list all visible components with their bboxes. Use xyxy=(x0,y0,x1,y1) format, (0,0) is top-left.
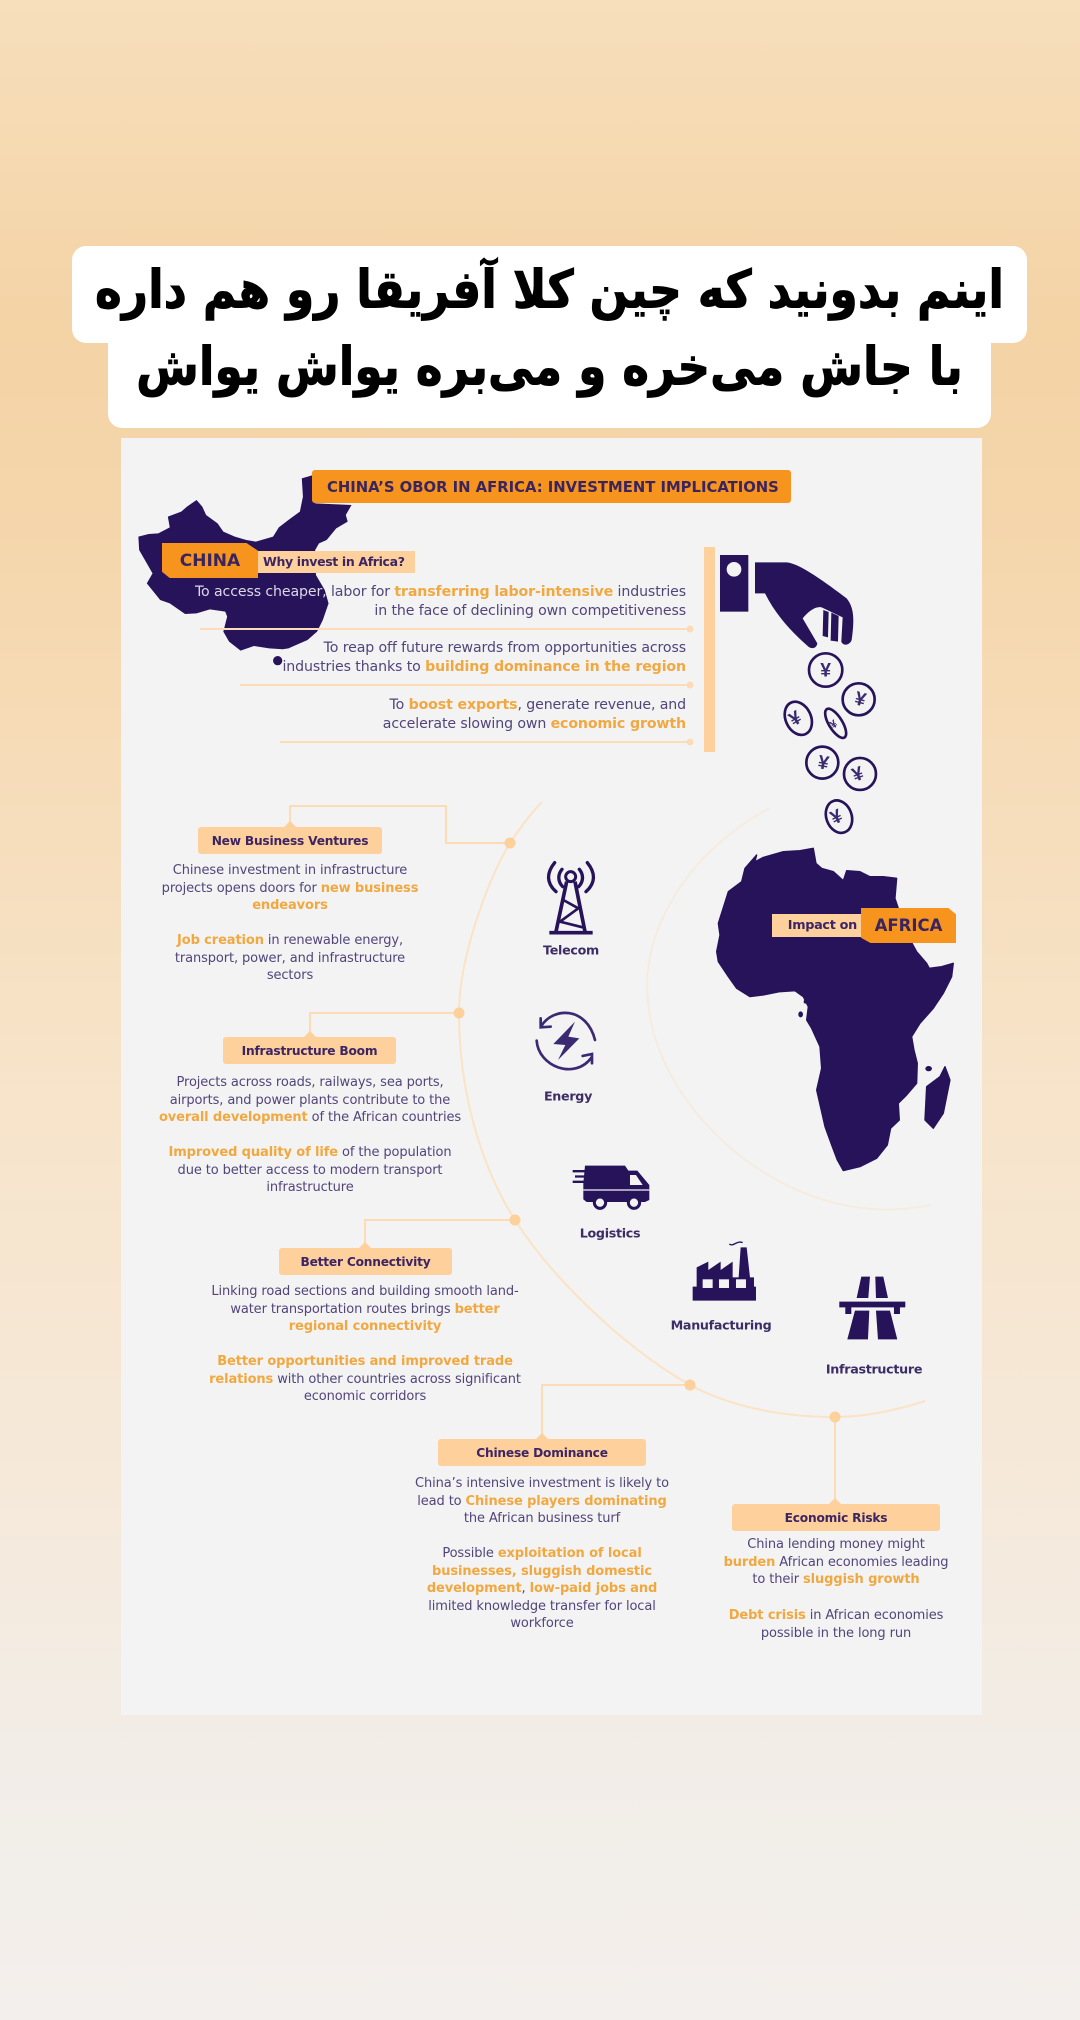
paragraph 1: overall development of the African countries xyxy=(159,1110,461,1125)
icon label: Logistics: Logistics xyxy=(580,1226,640,1240)
main timeline arc xyxy=(459,802,925,1417)
reason 2: industries thanks to building dominance in the region xyxy=(282,659,686,675)
reason divider arrows xyxy=(200,626,692,744)
paragraph 2 xyxy=(175,933,405,983)
title: Persian caption xyxy=(72,246,1027,428)
paragraph 1: regional connectivity xyxy=(289,1319,441,1334)
icon: hand dropping coins: ¥ xyxy=(849,763,867,787)
caption text: با جاش می‌خره و می‌بره یواش یواش xyxy=(136,336,963,397)
icon label: Energy: Energy xyxy=(544,1088,592,1104)
caption text: اینم بدونید که چین کلا آفریقا رو هم داره xyxy=(95,259,1004,320)
icon: hand dropping coins xyxy=(720,555,876,837)
icon: telecom tower xyxy=(549,863,593,933)
paragraph 2: Debt crisis in African economies xyxy=(729,1608,943,1623)
paragraph 1: China lending money might xyxy=(747,1537,925,1552)
icon: logistics truck xyxy=(573,1166,649,1208)
coins xyxy=(780,653,876,837)
paragraph 2 xyxy=(209,1354,521,1404)
paragraph 1: projects opens doors for new business xyxy=(162,881,418,896)
reasons list xyxy=(194,584,686,732)
paragraph 2: economic corridors xyxy=(304,1389,426,1404)
icon: infrastructure road xyxy=(839,1277,905,1339)
paragraph 2: due to better access to modern transport xyxy=(178,1163,442,1178)
tag: CHINA: CHINA xyxy=(180,551,240,571)
icon: hand dropping coins: ¥ xyxy=(820,661,831,682)
paragraph 1 xyxy=(159,1075,461,1125)
paragraph 1 xyxy=(211,1284,519,1334)
paragraph 2: infrastructure xyxy=(266,1180,354,1195)
map: Africa xyxy=(717,848,953,1171)
paragraph 2: workforce xyxy=(510,1616,574,1631)
icon: hand dropping coins: ¥ xyxy=(852,688,868,712)
caption background top xyxy=(72,246,1027,343)
paragraph 1: airports, and power plants contribute to the xyxy=(170,1093,450,1108)
tag: AFRICA xyxy=(861,908,956,943)
tag: Better Connectivity xyxy=(300,1254,430,1268)
heading bar xyxy=(312,470,791,503)
reason 3: accelerate slowing own economic growth xyxy=(383,716,686,732)
icon: hand dropping coins: ¥ xyxy=(827,806,846,829)
block: Economic Risks xyxy=(724,1504,948,1641)
tag xyxy=(438,1439,646,1466)
tag: AFRICA: AFRICA xyxy=(875,916,942,935)
icon: hand dropping coins: ¥ xyxy=(816,752,831,775)
paragraph 1: to their sluggish growth xyxy=(752,1572,920,1587)
tag: Impact on xyxy=(772,914,861,937)
tag: Impact on: Impact on xyxy=(788,918,857,933)
paragraph 2: Improved quality of life of the population xyxy=(169,1145,451,1160)
reason 3: To boost exports, generate revenue, and xyxy=(390,697,686,713)
paragraph 2: limited knowledge transfer for local xyxy=(428,1599,656,1614)
reason 2 xyxy=(282,640,686,675)
paragraph 2: Better opportunities and improved trade xyxy=(217,1354,513,1369)
paragraph 1 xyxy=(415,1476,669,1526)
paragraph 1: Chinese investment in infrastructure xyxy=(173,863,407,878)
paragraph 1: lead to Chinese players dominating xyxy=(417,1494,667,1509)
icon label: Telecom: Telecom xyxy=(543,942,599,958)
tag xyxy=(223,1037,396,1064)
icon: energy xyxy=(537,1013,595,1069)
paragraph 2: relations with other countries across significant xyxy=(209,1372,521,1387)
paragraph 1: Projects across roads, railways, sea ports, xyxy=(176,1075,444,1090)
paragraph 1: burden African economies leading xyxy=(724,1555,948,1570)
reason 2: To reap off future rewards from opportunities across xyxy=(324,640,686,656)
paragraph 2 xyxy=(169,1145,451,1195)
block: Better Connectivity xyxy=(209,1248,521,1404)
icon label: Manufacturing: Manufacturing xyxy=(671,1318,771,1332)
block: Infrastructure Boom xyxy=(159,1037,461,1195)
tag xyxy=(279,1248,452,1275)
heading bar: CHINA’S OBOR IN AFRICA: INVESTMENT IMPLICATIONS xyxy=(327,479,779,496)
paragraph 1: Linking road sections and building smooth land- xyxy=(211,1284,519,1299)
reason 1: in the face of declining own competitiveness xyxy=(374,603,686,619)
paragraph 2: sectors xyxy=(267,968,313,983)
paragraph 2: possible in the long run xyxy=(761,1626,911,1641)
tag: CHINA xyxy=(162,543,258,578)
map: China xyxy=(138,475,352,665)
paragraph 2: Job creation in renewable energy, xyxy=(177,933,403,948)
connectors with dots xyxy=(284,806,841,1504)
tag: Why invest in Africa: Why invest in Africa? xyxy=(263,554,405,569)
caption background bottom xyxy=(108,306,991,428)
arc around Africa xyxy=(647,808,930,1210)
paragraph 2 xyxy=(427,1546,657,1631)
reason 3 xyxy=(383,697,686,732)
paragraph 1 xyxy=(162,863,418,913)
icon: hand dropping coins: ¥ xyxy=(786,707,806,731)
tag: New Business Ventures xyxy=(212,834,368,848)
vertical orange bar xyxy=(704,547,715,752)
paragraph 1: China’s intensive investment is likely to xyxy=(415,1476,669,1491)
tag xyxy=(732,1504,940,1531)
paragraph 1: the African business turf xyxy=(464,1511,620,1526)
reason 1: To access cheaper, labor for transferring labor-intensive industries xyxy=(195,584,686,600)
paragraph 2: transport, power, and infrastructure xyxy=(175,951,405,966)
icon: manufacturing factory xyxy=(693,1242,756,1301)
block: New Business Ventures xyxy=(162,827,418,983)
icon label: Infrastructure: Infrastructure xyxy=(826,1362,922,1376)
paragraph 1: water transportation routes brings better xyxy=(230,1302,500,1317)
paragraph 2: Possible exploitation of local xyxy=(442,1546,642,1561)
block: Chinese Dominance xyxy=(415,1439,669,1631)
caption text xyxy=(95,256,1004,398)
paragraph 2: businesses, sluggish domestic xyxy=(432,1564,652,1579)
panel: infographic background xyxy=(121,438,982,1715)
paragraph 1 xyxy=(724,1537,948,1587)
paragraph 1: endeavors xyxy=(252,898,328,913)
paragraph 2 xyxy=(729,1608,943,1641)
reason 1 xyxy=(194,584,686,619)
tag xyxy=(198,827,382,854)
icon: hand dropping coins: ¥ xyxy=(828,718,841,732)
tag: Why invest in Africa xyxy=(258,551,415,573)
tag: Chinese Dominance xyxy=(476,1446,608,1460)
tag: Economic Risks xyxy=(785,1510,887,1524)
tag: Infrastructure Boom xyxy=(242,1044,377,1058)
paragraph 2: development, low-paid jobs and xyxy=(427,1581,657,1596)
